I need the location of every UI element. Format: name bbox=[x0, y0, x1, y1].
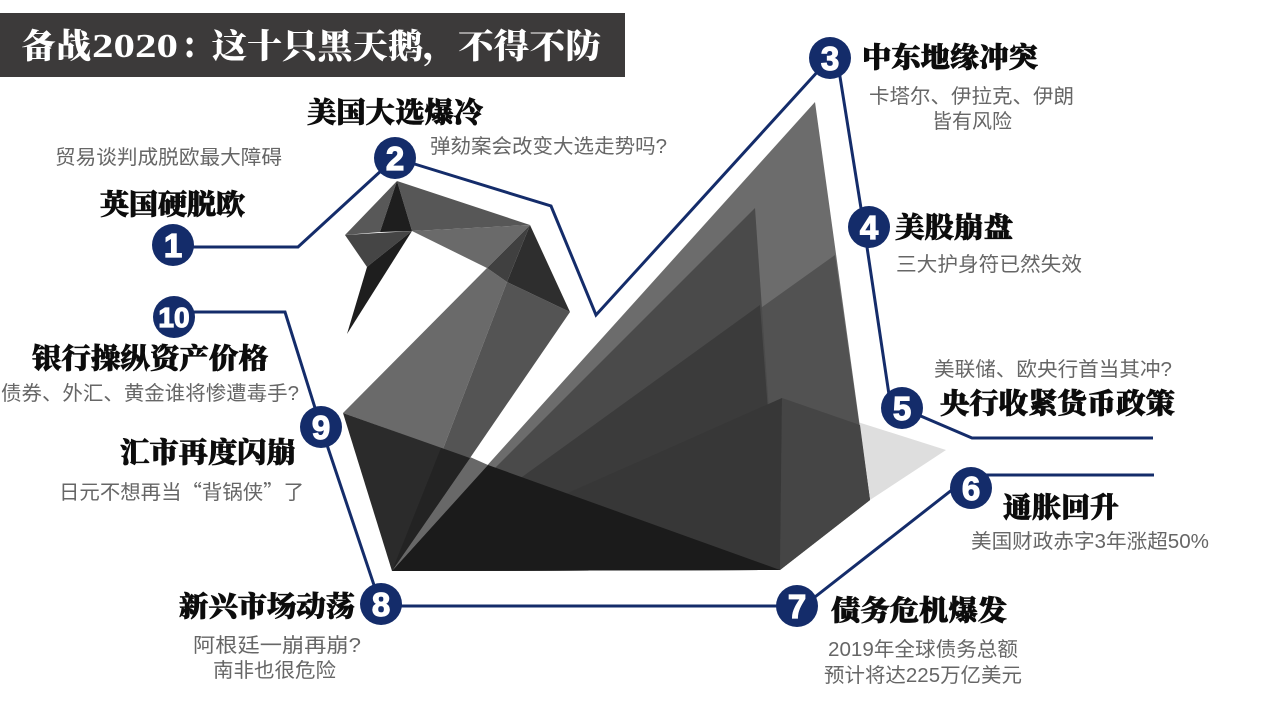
item 10: bank asset price manipulation: 银行操纵资产价格 bbox=[32, 342, 268, 375]
item 10: bank asset price manipulation bbox=[1, 296, 299, 405]
item 2: US election: 2 bbox=[386, 140, 404, 177]
title banner: 这十只黑天鹅， bbox=[212, 28, 458, 67]
origami black swan illustration bbox=[343, 102, 946, 571]
item 5: central bank tightening: 央行收紧货币政策 bbox=[940, 387, 1175, 420]
title banner bbox=[0, 13, 625, 77]
item 6: inflation rebound: 美国财政赤字3年涨超50% bbox=[971, 530, 1209, 553]
item 3: Middle East conflict: 卡塔尔、伊拉克、伊朗 bbox=[869, 85, 1074, 108]
item 7: debt crisis: 7 bbox=[788, 588, 806, 625]
item 1: UK hard Brexit bbox=[55, 146, 282, 266]
item 6: inflation rebound: 6 bbox=[962, 470, 980, 507]
item 8: emerging market turmoil: 阿根廷一崩再崩? bbox=[193, 634, 361, 657]
title banner: 不得不防 bbox=[458, 28, 601, 66]
item 1: UK hard Brexit: 1 bbox=[164, 227, 182, 264]
item 7: debt crisis: 债务危机爆发 bbox=[831, 594, 1007, 627]
item 5: central bank tightening: 美联储、欧央行首当其冲? bbox=[934, 358, 1172, 381]
item 8: emerging market turmoil: 南非也很危险 bbox=[213, 659, 336, 682]
item 5: central bank tightening bbox=[881, 358, 1175, 429]
item 10: bank asset price manipulation: 债券、外汇、黄金谁将惨遭毒手? bbox=[1, 382, 299, 405]
item 7: debt crisis: 2019年全球债务总额 bbox=[828, 638, 1018, 661]
item 1: UK hard Brexit: 英国硬脱欧 bbox=[100, 189, 245, 221]
item 7: debt crisis: 预计将达225万亿美元 bbox=[824, 664, 1022, 687]
item 4: US stock crash: 三大护身符已然失效 bbox=[896, 253, 1082, 276]
item 4: US stock crash: 4 bbox=[860, 209, 879, 246]
item 8: emerging market turmoil: 8 bbox=[372, 586, 390, 623]
item 9: currency flash crash: 日元不想再当“背锅侠”了 bbox=[59, 476, 304, 505]
item 4: US stock crash bbox=[848, 206, 1082, 276]
item 9: currency flash crash bbox=[59, 406, 342, 505]
item 8: emerging market turmoil bbox=[179, 583, 402, 682]
item 7: debt crisis bbox=[776, 585, 1022, 687]
connector lines bbox=[173, 58, 1154, 611]
title banner: 备战 bbox=[21, 28, 91, 66]
item 5: central bank tightening: 5 bbox=[893, 390, 911, 427]
item 3: Middle East conflict: 中东地缘冲突 bbox=[862, 41, 1038, 74]
item 6: inflation rebound bbox=[950, 467, 1209, 553]
item 2: US election bbox=[307, 96, 667, 179]
title banner: 2020 bbox=[92, 28, 178, 65]
item 9: currency flash crash: 9 bbox=[312, 409, 330, 446]
title banner: ： bbox=[181, 29, 211, 66]
item 1: UK hard Brexit: 贸易谈判成脱欧最大障碍 bbox=[55, 146, 282, 169]
item 3: Middle East conflict: 皆有风险 bbox=[932, 110, 1012, 133]
item 6: inflation rebound: 通胀回升 bbox=[1003, 492, 1119, 524]
item 10: bank asset price manipulation: 10 bbox=[158, 302, 190, 333]
item 4: US stock crash: 美股崩盘 bbox=[895, 211, 1013, 244]
item 2: US election: 弹劾案会改变大选走势吗? bbox=[430, 135, 667, 158]
item 3: Middle East conflict: 3 bbox=[821, 40, 839, 77]
item 2: US election: 美国大选爆冷 bbox=[307, 96, 483, 129]
item 8: emerging market turmoil: 新兴市场动荡 bbox=[179, 590, 355, 623]
item 9: currency flash crash: 汇市再度闪崩 bbox=[120, 436, 296, 469]
item 3: Middle East conflict bbox=[809, 37, 1074, 133]
